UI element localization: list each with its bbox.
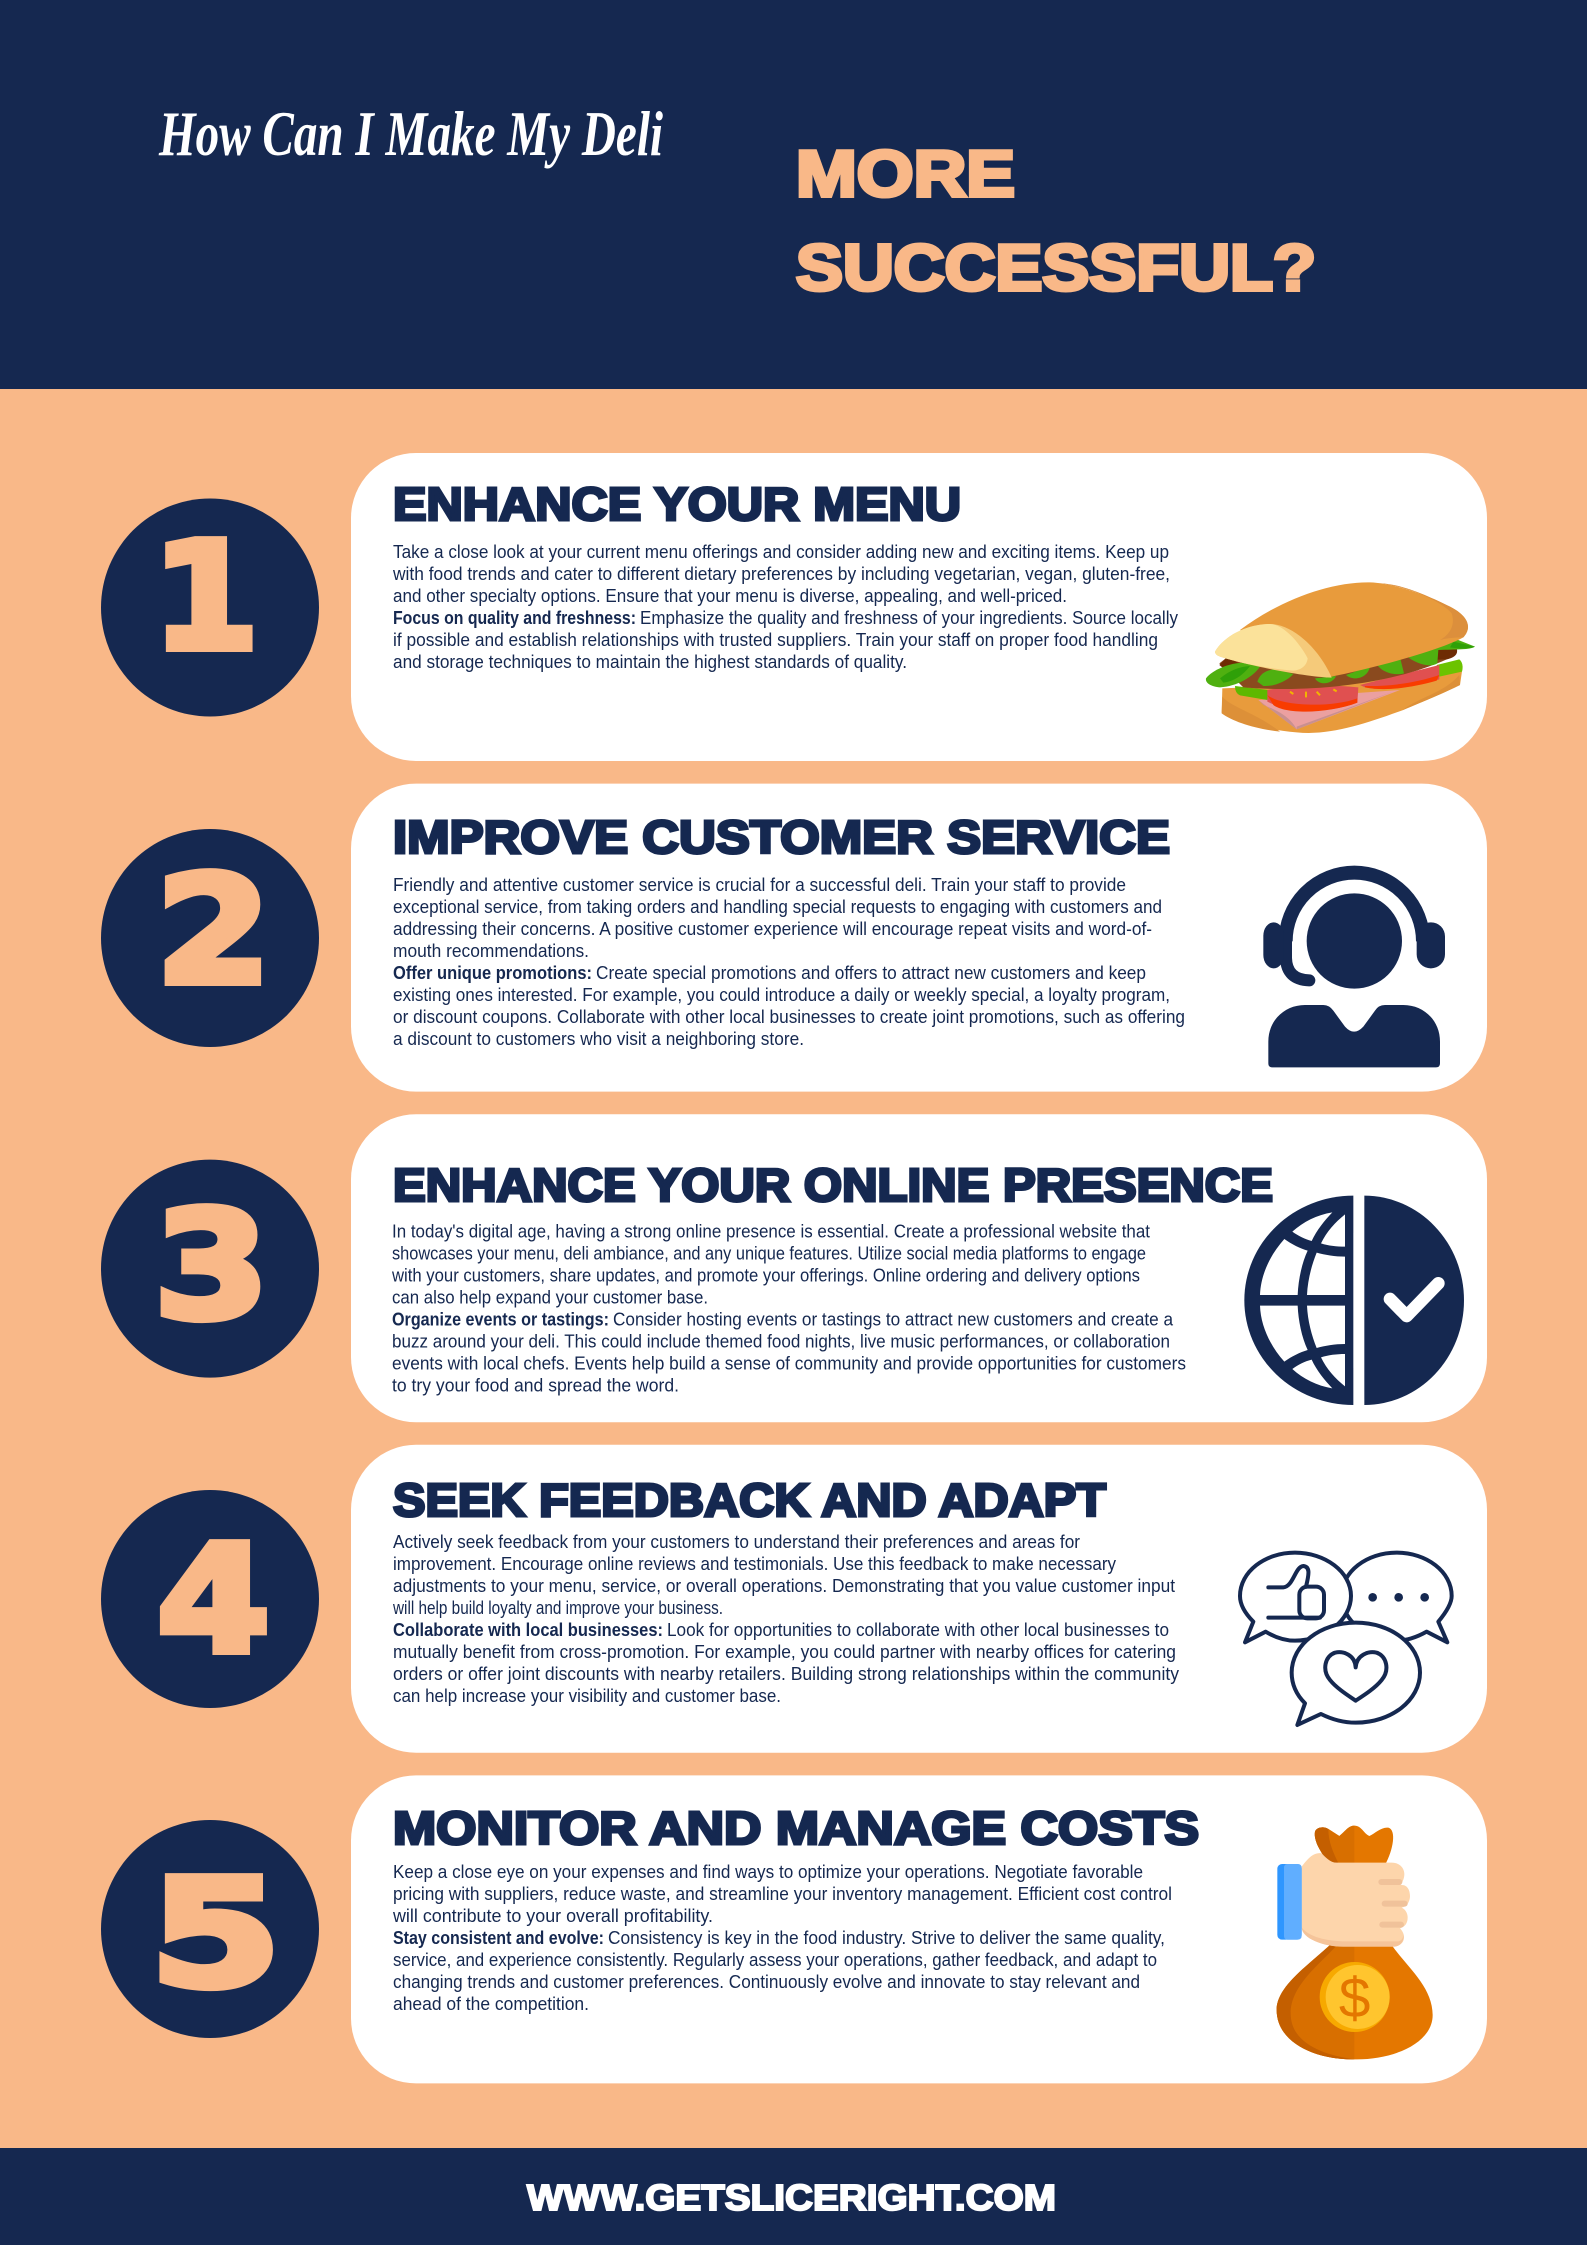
icon: sandwich	[1206, 582, 1475, 733]
body text 2: or discount coupons. Collaborate with other local businesses to create joint promotions, such as offering	[393, 1006, 1185, 1027]
body text 1: if possible and establish relationships with trusted suppliers. Train your staff on proper food handling	[393, 629, 1158, 650]
body text 2: Offer unique promotions:	[393, 962, 592, 983]
number badge 1: 1	[152, 511, 259, 683]
body text 2: Create special promotions and offers to attract new customers and keep	[596, 962, 1146, 983]
number badge 5: 5	[150, 1848, 281, 2020]
heading 2: IMPROVE CUSTOMER SERVICE	[393, 811, 1170, 863]
body text 5: changing trends and customer preferences. Continuously evolve and innovate to stay relevant and	[393, 1971, 1140, 1992]
icon: speech bubbles with thumb, dots and heart	[1240, 1553, 1452, 1725]
number badge 4: 4	[157, 1514, 270, 1686]
card 4	[351, 1445, 1487, 1753]
body text 3: Consider hosting events or tastings to attract new customers and create a	[613, 1308, 1174, 1330]
header band	[0, 0, 1587, 389]
body text 2: mouth recommendations.	[393, 940, 589, 961]
step 4	[101, 1445, 1487, 1753]
body text 2: exceptional service, from taking orders and handling special requests to engaging with customers and	[393, 896, 1162, 917]
body text 3: In today's digital age, having a strong online presence is essential. Create a professional website that	[392, 1220, 1150, 1242]
body text 4: orders or offer joint discounts with nearby retailers. Building strong relationships within the community	[393, 1663, 1180, 1684]
body text 1: with food trends and cater to different dietary preferences by including vegetarian, vegan, gluten-free,	[392, 563, 1170, 584]
card 2	[351, 784, 1487, 1092]
heading 3: ENHANCE YOUR ONLINE PRESENCE	[393, 1159, 1273, 1211]
body text 2: a discount to customers who visit a neighboring store.	[393, 1028, 804, 1049]
body text 5: pricing with suppliers, reduce waste, and streamline your inventory management. Efficient cost control	[393, 1883, 1172, 1904]
body text 1: Take a close look at your current menu offerings and consider adding new and exciting items. Keep up	[393, 541, 1169, 562]
footer band	[0, 2148, 1587, 2245]
body text 1: Emphasize the quality and freshness of your ingredients. Source locally	[640, 607, 1179, 628]
heading 1: ENHANCE YOUR MENU	[393, 478, 961, 530]
number badge 5	[101, 1820, 319, 2038]
body text 4: will help build loyalty and improve your business.	[392, 1597, 723, 1618]
body text 1: Focus on quality and freshness:	[393, 607, 636, 628]
icon: support agent with headset	[1263, 873, 1445, 1067]
title: MORE SUCCESSFUL: MORE	[796, 137, 1015, 210]
body text 3	[391, 1220, 1186, 1396]
icon: hand holding money bag	[1277, 1826, 1433, 2059]
body text 5: will contribute to your overall profitability.	[392, 1905, 713, 1926]
body text 4: Collaborate with local businesses:	[393, 1619, 663, 1640]
body text 5: Stay consistent and evolve:	[393, 1927, 604, 1948]
title: MORE SUCCESSFUL	[796, 137, 1316, 304]
body text 2: Friendly and attentive customer service is crucial for a successful deli. Train your staff to provide	[393, 874, 1126, 895]
body text 3: with your customers, share updates, and promote your offerings. Online ordering and delivery options	[391, 1264, 1140, 1286]
number badge 2: 2	[156, 845, 271, 1017]
body text 5	[392, 1861, 1172, 2014]
icon: hand holding money bag: $	[1339, 1967, 1370, 2030]
step 1	[101, 453, 1487, 761]
body text 2	[393, 874, 1185, 1049]
body text 3: buzz around your deli. This could include themed food nights, live music performances, or collaboration	[392, 1330, 1170, 1352]
body text 3: can also help expand your customer base.	[392, 1286, 708, 1308]
step 3	[101, 1114, 1487, 1422]
body text 1	[392, 541, 1179, 672]
card 3	[351, 1114, 1487, 1422]
card 1	[351, 453, 1487, 761]
body text 4: adjustments to your menu, service, or overall operations. Demonstrating that you value customer input	[393, 1575, 1175, 1596]
body text 5: Consistency is key in the food industry. Strive to deliver the same quality,	[608, 1927, 1165, 1948]
body text 5: ahead of the competition.	[393, 1993, 589, 2014]
title: MORE SUCCESSFUL: SUCCESSFUL?	[796, 231, 1316, 304]
number badge 2	[101, 829, 319, 1047]
body text 3: Organize events or tastings:	[392, 1308, 609, 1330]
body text 5: service, and experience consistently. Regularly assess your operations, gather feedback, and adapt to	[393, 1949, 1157, 1970]
number badge 3: 3	[154, 1180, 269, 1352]
body text 2: existing ones interested. For example, you could introduce a daily or weekly special, a loyalty program,	[393, 984, 1170, 1005]
card 5	[351, 1775, 1487, 2083]
number badge 1	[101, 498, 319, 716]
body text 4: Look for opportunities to collaborate with other local businesses to	[667, 1619, 1169, 1640]
body text 3: showcases your menu, deli ambiance, and any unique features. Utilize social media platforms to engage	[392, 1242, 1146, 1264]
heading 5: MONITOR AND MANAGE COSTS	[393, 1802, 1199, 1854]
footer url: WWW.GETSLICERIGHT.COM	[527, 2177, 1056, 2218]
body text 4	[392, 1531, 1180, 1706]
body text 1: and other specialty options. Ensure that your menu is diverse, appealing, and well-priced.	[393, 585, 1067, 606]
heading 4: SEEK FEEDBACK AND ADAPT	[393, 1474, 1106, 1526]
title: script line: How Can I Make My Deli	[158, 98, 663, 169]
step 5	[101, 1775, 1487, 2083]
body text 1: and storage techniques to maintain the highest standards of quality.	[393, 651, 907, 672]
body text 2: addressing their concerns. A positive customer experience will encourage repeat visits and word-of-	[393, 918, 1152, 939]
number badge 3	[101, 1160, 319, 1378]
icon: globe with checkmark	[1244, 1196, 1464, 1405]
body text 4: Actively seek feedback from your customers to understand their preferences and areas for	[393, 1531, 1080, 1552]
body text 4: mutually benefit from cross-promotion. For example, you could partner with nearby offices for catering	[393, 1641, 1176, 1662]
body text 3: events with local chefs. Events help build a sense of community and provide opportunities for customers	[392, 1352, 1186, 1374]
body text 4: improvement. Encourage online reviews and testimonials. Use this feedback to make necessary	[393, 1553, 1117, 1574]
body text 5: Keep a close eye on your expenses and find ways to optimize your operations. Negotiate favorable	[393, 1861, 1143, 1882]
step 2	[101, 784, 1487, 1092]
body text 4: can help increase your visibility and customer base.	[393, 1685, 781, 1706]
number badge 4	[101, 1490, 319, 1708]
body text 3: to try your food and spread the word.	[392, 1374, 679, 1396]
